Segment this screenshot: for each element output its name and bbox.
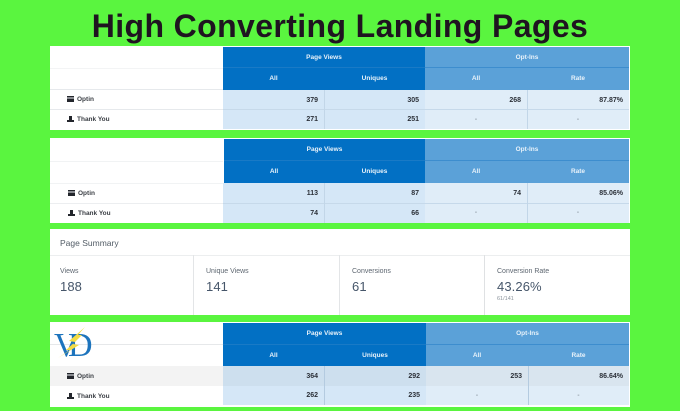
value <box>527 203 629 223</box>
header: All views <box>224 161 324 183</box>
header: All views: All <box>269 75 278 82</box>
stat: Views: Views <box>60 268 79 275</box>
value <box>223 203 324 223</box>
value: 292 <box>408 372 420 380</box>
header: Uniques: Uniques <box>362 75 387 82</box>
header: All opt-ins <box>425 68 527 90</box>
value <box>425 90 527 110</box>
header: All views <box>223 68 324 90</box>
header: Opt-Ins <box>425 47 629 68</box>
header: Opt-Ins: Opt-Ins <box>516 330 539 337</box>
value: 87.87% <box>599 96 623 104</box>
row label: Optin <box>68 190 95 197</box>
value <box>324 90 425 110</box>
header: All views <box>223 345 324 366</box>
value: 268 <box>509 96 521 104</box>
header: Rate <box>527 161 629 183</box>
header: Opt-Ins <box>425 139 629 161</box>
header: All opt-ins: All <box>473 352 481 358</box>
value <box>425 110 527 129</box>
value: 74 <box>513 190 521 196</box>
header: Rate: Rate <box>571 352 586 358</box>
value: 86.64% <box>599 372 623 380</box>
header: Page Views <box>224 139 425 161</box>
header: Rate <box>527 68 629 90</box>
value: - <box>475 116 477 122</box>
value: 305 <box>407 96 419 104</box>
heading: Page Summary: Page Summary <box>60 238 119 248</box>
header: Uniques: Uniques <box>362 168 387 175</box>
value: 235 <box>408 392 420 399</box>
header: Uniques: Uniques <box>362 352 388 358</box>
value <box>324 183 425 203</box>
stat: Conversion Rate: Conversion Rate <box>497 268 549 275</box>
row label: Thank You: Thank You <box>77 116 110 123</box>
value <box>426 386 528 405</box>
header: All views: All <box>270 168 278 175</box>
header: Page Views: Page Views <box>306 54 342 60</box>
value <box>527 183 629 203</box>
header: All opt-ins: All <box>472 168 480 175</box>
value <box>528 366 629 386</box>
value: 271 <box>306 116 318 123</box>
header: Rate <box>528 345 629 366</box>
stat: Unique Views: 141 <box>206 279 228 294</box>
value: 364 <box>306 372 318 380</box>
row label: Thank You: Thank You <box>77 393 110 400</box>
value <box>223 386 324 405</box>
header: Uniques <box>324 161 425 183</box>
stat: Views: 188 <box>60 279 82 294</box>
value <box>426 366 528 386</box>
panel: table 3 <box>50 322 630 407</box>
value <box>528 386 629 405</box>
value: - <box>577 209 579 216</box>
header: Opt-Ins: Opt-Ins <box>516 54 538 60</box>
value: 87 <box>411 190 419 196</box>
value <box>324 203 425 223</box>
header: Page Views: Page Views <box>307 330 342 337</box>
panel: table 2 <box>50 138 630 223</box>
panel: table 1 <box>50 46 630 130</box>
header: Page Views <box>223 323 426 345</box>
icon: VD logo <box>54 327 93 362</box>
row label: Optin <box>67 96 94 103</box>
stat: Unique Views: Unique Views <box>206 268 249 275</box>
stat: Conversions: 61 <box>352 279 367 294</box>
header: All views: All <box>269 352 278 358</box>
header: Page Views <box>223 47 425 68</box>
stat: Conversions <box>352 268 391 294</box>
header: Uniques <box>324 68 425 90</box>
value <box>223 183 324 203</box>
row label: Optin: Optin <box>77 96 94 103</box>
value: 251 <box>407 116 419 123</box>
stat: Conversion Rate: 43.26% <box>497 279 542 294</box>
value: 262 <box>306 392 318 399</box>
value <box>324 110 425 129</box>
value: 66 <box>411 210 419 216</box>
row label: Thank You: Thank You <box>78 210 111 217</box>
value: - <box>476 392 478 398</box>
value <box>223 110 324 129</box>
stat: Conversion Rate <box>497 268 549 302</box>
value: - <box>577 392 580 398</box>
value: 113 <box>307 190 318 196</box>
value: 85.06% <box>599 190 623 196</box>
value <box>425 203 527 223</box>
value: - <box>475 209 477 216</box>
title: High Converting Landing Pages <box>92 8 588 44</box>
value: - <box>577 116 579 122</box>
header: Opt-Ins <box>426 323 629 345</box>
value <box>223 90 324 110</box>
header: All opt-ins <box>425 161 527 183</box>
value <box>425 183 527 203</box>
value <box>527 110 629 129</box>
header: Opt-Ins: Opt-Ins <box>516 146 538 153</box>
header: All opt-ins <box>426 345 528 366</box>
value: 253 <box>510 372 522 380</box>
value <box>324 366 426 386</box>
stat: Conversion Rate: 61/141 <box>497 296 514 302</box>
stat: Views <box>60 268 82 294</box>
value <box>324 386 426 405</box>
value <box>223 366 324 386</box>
row label: Optin: Optin <box>77 373 94 380</box>
stat: Conversions: Conversions <box>352 268 391 275</box>
header: Uniques <box>324 345 426 366</box>
value: 379 <box>306 96 318 104</box>
panel: page summary <box>50 229 630 315</box>
header: Page Views: Page Views <box>307 146 342 153</box>
header: All opt-ins: All <box>472 75 480 82</box>
header: Rate: Rate <box>571 75 585 82</box>
value: 74 <box>310 210 318 216</box>
header: Rate: Rate <box>571 168 585 175</box>
stat: Unique Views <box>206 268 249 294</box>
row label: Optin <box>67 373 94 380</box>
row label: Optin: Optin <box>78 190 95 197</box>
value <box>527 90 629 110</box>
